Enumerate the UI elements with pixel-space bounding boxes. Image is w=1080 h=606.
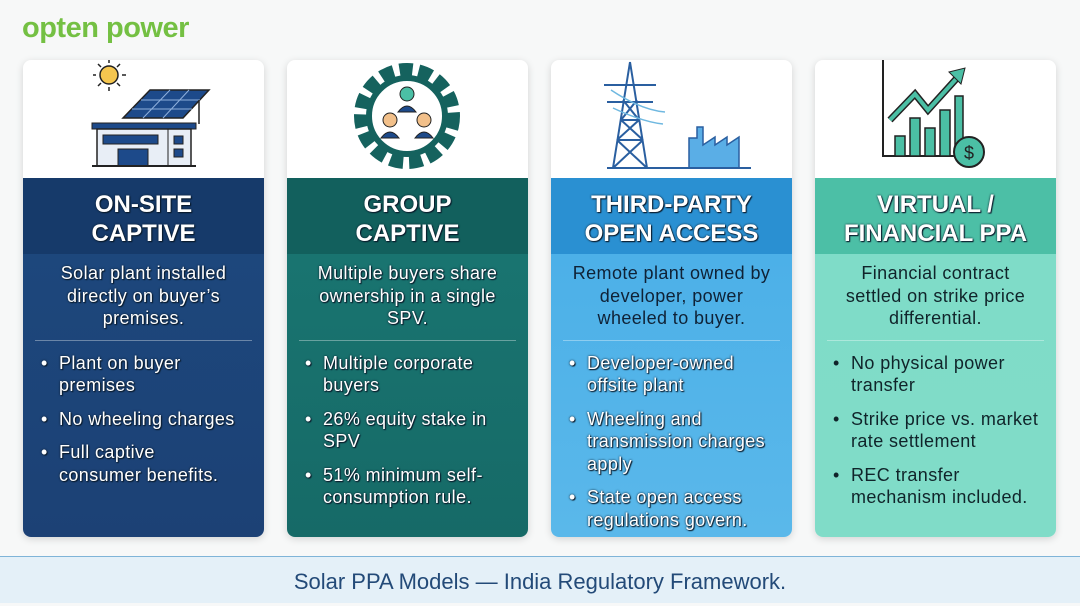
text block: Wheeling and transmission charges apply	[587, 408, 765, 474]
text block: Multiple corporate buyers	[323, 352, 473, 395]
heading: VIRTUAL /	[877, 191, 994, 218]
text block: Full captive	[59, 442, 155, 462]
text block	[287, 254, 528, 537]
heading: OPEN ACCESS	[585, 220, 758, 247]
heading: FINANCIAL PPA	[844, 220, 1027, 247]
panel: on-site captive	[23, 60, 264, 537]
text block: Developer-owned offsite plant	[587, 352, 734, 395]
text block	[23, 254, 264, 537]
text block: 26% equity stake in SPV	[323, 408, 487, 451]
icon: chart with arrow and dollar: $	[964, 143, 974, 163]
footer caption: Solar PPA Models — India Regulatory Framework.	[294, 569, 786, 594]
footer caption	[0, 556, 1080, 603]
heading: THIRD-PARTY	[591, 191, 752, 218]
panel: virtual financial ppa	[815, 60, 1056, 537]
icon: solar building	[92, 60, 211, 167]
heading	[287, 178, 528, 254]
icon: transmission tower and factory	[604, 62, 751, 169]
heading	[551, 178, 792, 254]
heading	[23, 178, 264, 254]
icon: chart with arrow and dollar	[882, 60, 985, 168]
text block: Strike price vs. market rate settlement	[851, 408, 1038, 451]
heading	[815, 178, 1056, 254]
heading: GROUP	[363, 191, 452, 218]
text block: REC transfer mechanism included.	[851, 464, 1028, 507]
text block: Solar plant installed directly on buyer’s premises.	[61, 263, 226, 328]
text block: 51% minimum self-consumption rule.	[323, 464, 483, 507]
panel: group captive	[287, 60, 528, 537]
text block: Remote plant owned by developer, power wheeled to buyer.	[573, 263, 770, 328]
text block: consumer benefits.	[59, 464, 218, 484]
text block: Multiple buyers share ownership in a single SPV.	[318, 263, 497, 328]
heading: CAPTIVE	[91, 220, 196, 247]
text block: Plant on buyer premises	[59, 352, 181, 395]
heading: ON-SITE	[95, 191, 192, 218]
text block: Financial contract settled on strike price differential.	[846, 263, 1025, 328]
text block: No physical power transfer	[851, 352, 1005, 395]
heading: CAPTIVE	[355, 220, 460, 247]
icon: gear with people	[354, 63, 460, 169]
text block: No wheeling charges	[59, 408, 235, 428]
text block	[551, 254, 792, 537]
text block: State open access regulations govern.	[587, 487, 748, 530]
panel: third-party open access	[551, 60, 792, 537]
text block	[815, 254, 1056, 537]
logo: opten power	[22, 12, 189, 44]
